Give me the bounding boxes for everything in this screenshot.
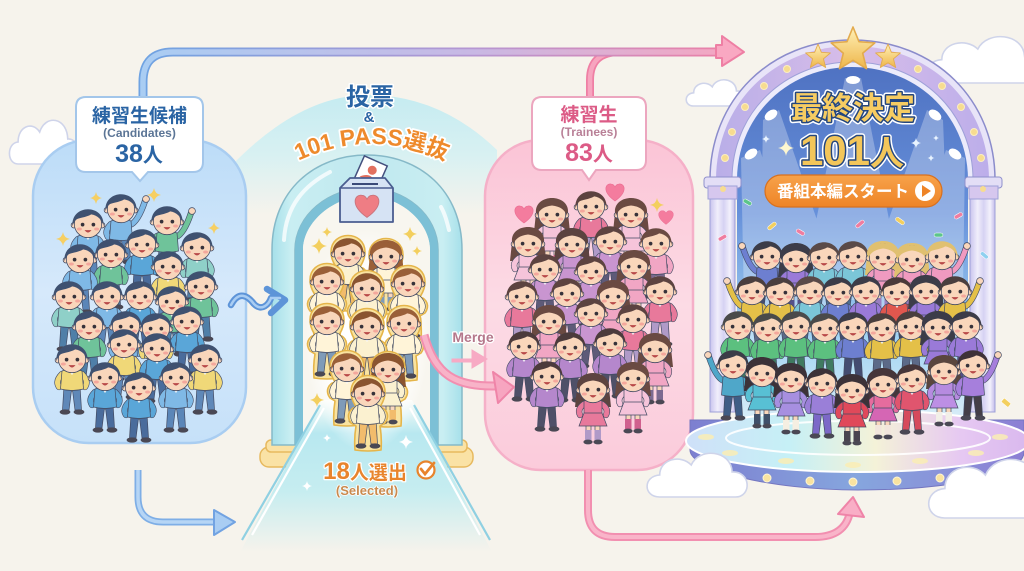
stage xyxy=(686,410,1024,490)
arch bulbs xyxy=(722,66,984,162)
button: show start xyxy=(765,175,942,207)
sparkle xyxy=(650,198,664,212)
spotlights xyxy=(741,78,965,350)
crowd: 83 trainees xyxy=(505,191,677,444)
cloud: left xyxy=(9,120,78,164)
cloud: stage right xyxy=(929,459,1024,518)
panel: candidates xyxy=(33,140,246,443)
crowd: 38 candidates xyxy=(52,194,222,443)
icon: check badge xyxy=(418,462,434,478)
title: final decision: 最終決定 xyxy=(791,91,915,126)
glow behind selected group xyxy=(305,228,429,452)
panel: final stage arch xyxy=(704,40,1011,430)
cloud: upper middle right xyxy=(686,80,745,106)
cloud: top right xyxy=(927,37,1024,83)
hearts xyxy=(515,184,673,224)
spotlight lamps xyxy=(743,76,963,162)
crowd: final 101 xyxy=(705,241,1001,445)
label: 18 selected: 18人選出 xyxy=(323,458,407,485)
callout: candidates xyxy=(76,97,203,181)
title: 101 PASS selection: 101 PASS選抜 xyxy=(293,126,452,164)
title: 101 people: 101人 xyxy=(800,127,904,174)
cloud: stage left xyxy=(647,453,747,497)
title: 101 people: 101人 xyxy=(800,127,904,174)
sparkles xyxy=(762,135,939,162)
stars on arch xyxy=(806,27,900,69)
button label: 番組本編スタート xyxy=(777,182,909,201)
arrow: trainees to final xyxy=(588,470,864,537)
crowd: 18 selected xyxy=(308,236,427,451)
sparkles xyxy=(56,188,220,246)
second row xyxy=(724,275,983,348)
panel: trainees xyxy=(485,140,693,470)
callout number: 83人 xyxy=(565,139,613,167)
callout: trainees xyxy=(532,97,646,180)
arrow: candidates down to selection xyxy=(138,470,235,535)
icon: heart xyxy=(355,195,379,217)
arrow: pink branch from trainees xyxy=(590,52,650,100)
back row xyxy=(739,241,970,314)
columns xyxy=(704,177,1002,412)
arch frame xyxy=(710,40,995,180)
icon: ballot box xyxy=(340,156,393,222)
confetti xyxy=(718,198,1011,408)
label: selected: (Selected) xyxy=(336,483,398,498)
callout subtitle: (Trainees) xyxy=(561,125,617,139)
spotlight road xyxy=(240,400,492,552)
stage sky xyxy=(737,67,968,430)
arrow: top blue-to-pink flow xyxy=(143,36,744,145)
stage floor lights xyxy=(698,434,1008,468)
panel: big halo arch xyxy=(232,95,497,215)
callout title: 練習生 xyxy=(560,104,618,126)
road sparkles xyxy=(302,434,413,491)
title: final decision: 最終決定 xyxy=(791,91,915,126)
front row xyxy=(705,350,1001,445)
icon: play xyxy=(915,181,935,201)
title: ampersand: & xyxy=(364,109,375,126)
gold column bases xyxy=(260,440,473,467)
callout number: 38人 xyxy=(115,140,163,168)
label: merge: Merge xyxy=(452,329,494,345)
road edges xyxy=(242,405,490,540)
callout title: 練習生候補 xyxy=(92,105,187,127)
panel: glass arch xyxy=(260,155,473,467)
sparkles xyxy=(310,227,422,407)
title: voting: 投票 xyxy=(346,84,394,111)
stage bulbs xyxy=(763,474,944,486)
arrow: squiggle to voting xyxy=(231,289,285,313)
arrow: merge xyxy=(452,350,487,368)
callout subtitle: (Candidates) xyxy=(103,126,176,140)
label: 18 selected xyxy=(323,458,434,498)
third row xyxy=(721,311,983,384)
arrow: selected merge curve xyxy=(424,335,514,403)
